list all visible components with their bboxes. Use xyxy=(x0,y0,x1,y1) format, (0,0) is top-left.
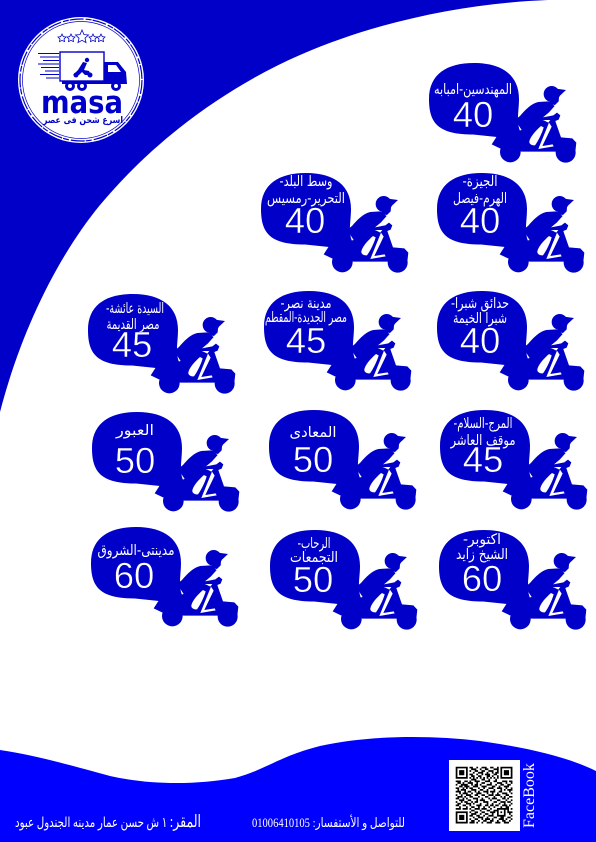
area name: حدائق شبرا- xyxy=(451,296,509,312)
price card: الرحاب-التجمعات 50 xyxy=(270,530,417,630)
price card: الجيزة 40 xyxy=(437,173,584,273)
price card: اكتوبر-الشيخ زايد 60: الشيخ زايد xyxy=(456,547,508,563)
area name: الرحاب- xyxy=(298,536,330,552)
price card: المهندسين-امبابه 40 xyxy=(429,63,576,163)
price card: مدينة نصر 45 xyxy=(264,291,411,391)
price card: الرحاب-التجمعات 50: التجمعات xyxy=(290,550,338,566)
price card: المعادى 50 xyxy=(269,410,416,510)
area name: السيدة عائشة- xyxy=(106,301,164,317)
price: 45 xyxy=(112,324,152,365)
area name: المرج-السلام- xyxy=(454,416,512,433)
price card: الجيزة 40: الهرم-فيصل xyxy=(453,191,507,207)
price card: وسط البلد 40 xyxy=(261,173,408,273)
price card: حدائق شبرا 40: شبرا الخيمة xyxy=(453,311,507,327)
price card: السيدة عائشة 45 xyxy=(88,294,235,394)
price card: المرج-السلام 45 xyxy=(440,410,587,510)
price: 50 xyxy=(115,440,155,481)
area name: مدينتى-الشروق xyxy=(98,543,174,559)
price card: اكتوبر-الشيخ زايد 60 xyxy=(439,530,586,630)
price: 40 xyxy=(285,200,325,241)
QR code xyxy=(449,760,520,831)
logo stars xyxy=(58,30,105,43)
area name: مدينة نصر- xyxy=(280,296,332,312)
price card: السيدة عائشة 45: مصر القديمة xyxy=(106,317,160,333)
background: top-left blue swoosh xyxy=(0,0,548,412)
area name: وسط البلد- xyxy=(280,174,332,190)
area name: اكتوبر- xyxy=(463,532,501,548)
price card: مدينة نصر 45: مصر الجديدة-المقطم xyxy=(265,310,347,326)
logo tagline: اسرع شحن فى عصر xyxy=(42,116,123,126)
price: 45 xyxy=(463,439,503,480)
price: 40 xyxy=(460,200,500,241)
price card: العبور 50 xyxy=(92,412,239,512)
footer: blue wave band xyxy=(0,737,596,842)
contact line: للتواصل و الأستفسار: 01006410105 xyxy=(252,814,405,831)
price: 45 xyxy=(286,320,326,361)
price: 40 xyxy=(453,94,493,135)
price: 60 xyxy=(114,555,154,596)
price card: حدائق شبرا 40 xyxy=(437,291,584,391)
area name: الجيزة- xyxy=(462,174,498,190)
price: 50 xyxy=(293,559,333,600)
address line: المقر: ١ ش حسن عمار مدينه الجندول عبود xyxy=(15,812,201,831)
price card: وسط البلد 40: التحرير-رمسيس xyxy=(267,191,345,207)
area name: المهندسين-امبابه xyxy=(434,82,512,98)
area name: المعادى xyxy=(290,425,336,441)
price: 60 xyxy=(462,558,502,599)
price: 40 xyxy=(460,320,500,361)
price card: مدينتى-الشروق 60 xyxy=(91,527,238,627)
logo wordmark: masa xyxy=(41,85,123,121)
logo truck xyxy=(38,52,127,91)
price: 50 xyxy=(293,439,333,480)
logo: masa round stamp xyxy=(18,17,144,143)
price card: المرج-السلام 45: موقف العاشر xyxy=(450,433,516,449)
area name: العبور xyxy=(115,423,154,439)
FaceBook vertical label: FaceBook xyxy=(521,763,538,828)
